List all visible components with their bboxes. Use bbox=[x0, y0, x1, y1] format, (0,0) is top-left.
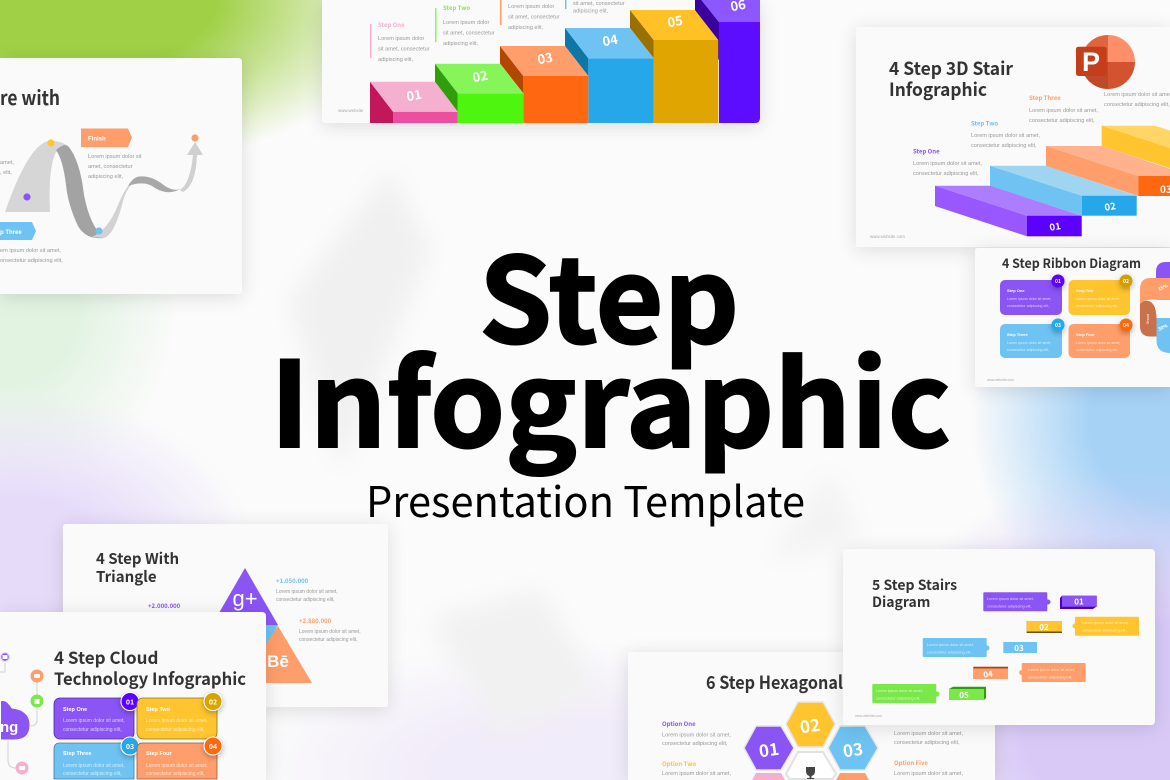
card: step two: consectetur adipiscing elit, bbox=[146, 727, 205, 733]
option two: Option Two bbox=[662, 759, 696, 768]
dot: purple bbox=[23, 193, 31, 201]
column 06 bbox=[695, 0, 760, 123]
dot: blue bbox=[95, 227, 103, 235]
card: step one: Step One bbox=[1007, 288, 1025, 293]
ribbon graphic: 15% bbox=[1157, 283, 1169, 293]
icon: green node bbox=[30, 694, 44, 708]
card: step four: Step Four bbox=[146, 751, 173, 757]
text: step two: sit amet, consectetur bbox=[443, 30, 495, 36]
option one: consectetur adipiscing elit, bbox=[662, 741, 728, 747]
stair 02: 02 bbox=[1103, 198, 1117, 214]
callout 03: consectetur adipiscing elit, bbox=[927, 650, 972, 654]
panel: 4 step 3D stair infographic bbox=[856, 27, 1170, 247]
card: step three: consectetur adipiscing elit, bbox=[1007, 348, 1049, 352]
triangle graphic: Bē bbox=[267, 652, 289, 671]
hexagon centre with trophy bbox=[786, 752, 836, 779]
heading: Infographic bbox=[889, 76, 987, 102]
hexagon 01: 01 bbox=[757, 735, 780, 762]
stat: 2.880.000 bbox=[299, 616, 361, 643]
option one bbox=[662, 719, 731, 747]
text: step three: Lorem ipsum dolor bbox=[508, 4, 554, 10]
card: step one: Lorem ipsum dolor sit amet, bbox=[63, 718, 125, 724]
icon: orange node bbox=[30, 670, 44, 682]
heading: Technology Infographic bbox=[54, 665, 246, 690]
panel: structure with ribbon bbox=[0, 58, 242, 294]
stair 04 bbox=[1102, 126, 1170, 168]
callout 02: Lorem ipsum dolor sit amet, bbox=[1082, 621, 1129, 625]
callout 05: Lorem ipsum dolor sit amet, bbox=[876, 689, 923, 693]
callout 02: consectetur adipiscing elit, bbox=[1082, 628, 1127, 632]
card: step four: Lorem ipsum dolor sit amet, bbox=[1076, 341, 1120, 345]
column 03: 03 bbox=[536, 47, 554, 68]
text: step three: Lorem ipsum dolor sit amet, bbox=[1029, 108, 1098, 114]
heading: 4 Step Cloud bbox=[54, 644, 158, 669]
panel: 4 step ribbon diagram bbox=[975, 248, 1170, 387]
card: step two: 02 bbox=[209, 698, 217, 708]
stair 02 bbox=[990, 166, 1137, 216]
text: step one: Lorem ipsum dolor bbox=[378, 36, 424, 42]
card: step two: Step Two bbox=[1076, 288, 1094, 293]
text: step two: Step Two bbox=[443, 3, 470, 12]
subtitle: Presentation Template bbox=[366, 469, 805, 530]
triangle graphic bbox=[212, 568, 312, 683]
card: step two bbox=[137, 692, 222, 739]
card: step one bbox=[54, 692, 139, 739]
option five: Lorem ipsum dolor sit amet, bbox=[894, 731, 963, 737]
stat: 1.050.000: Lorem ipsum dolor sit amet, bbox=[276, 589, 338, 595]
main title: Step bbox=[479, 206, 739, 377]
option five: Option Five bbox=[894, 758, 928, 767]
text: step four: adipiscing elit, bbox=[573, 8, 609, 14]
card: step two: 02 bbox=[1123, 278, 1129, 285]
heading: 6 Step Hexagonal bbox=[706, 669, 843, 695]
step block 05: 05 bbox=[959, 690, 969, 701]
callout 05: consectetur adipiscing elit, bbox=[876, 696, 921, 700]
hexagon pink bbox=[752, 773, 785, 780]
stat: 2.880.000: Lorem ipsum dolor sit amet, bbox=[299, 629, 361, 635]
text: step one: Step One bbox=[913, 146, 940, 156]
ribbon graphic: 30% bbox=[1157, 323, 1169, 333]
hexagon 01 bbox=[744, 726, 794, 770]
text: website: www.website bbox=[338, 108, 364, 113]
text: step one: Lorem ipsum dolor sit amet, bbox=[913, 161, 982, 167]
tag: step three bbox=[0, 222, 36, 240]
card: step two: consectetur adipiscing elit, bbox=[1076, 304, 1118, 308]
text: step four: consectetur adipiscing elit, bbox=[1104, 102, 1170, 108]
finish text: amet, consectetur bbox=[88, 164, 133, 170]
step block 05 bbox=[949, 687, 986, 701]
callout 05 bbox=[872, 684, 940, 703]
icon: powerpoint logo bbox=[1076, 35, 1135, 89]
option one: Option One bbox=[662, 719, 696, 728]
text: step two: Lorem ipsum dolor sit amet, bbox=[971, 133, 1040, 139]
text: step one: Step One bbox=[378, 20, 405, 29]
card: step one: Step One bbox=[63, 707, 87, 713]
card: step four: 04 bbox=[209, 742, 217, 752]
column 05 bbox=[630, 10, 718, 123]
stair 01 bbox=[935, 186, 1082, 236]
text: step four bbox=[565, 0, 625, 14]
card: step two: Lorem ipsum dolor sit amet, bbox=[146, 718, 208, 724]
dot: yellow bbox=[47, 139, 55, 147]
text: step three bbox=[1029, 93, 1098, 124]
card: step two bbox=[1068, 274, 1132, 315]
hexagon 02: 02 bbox=[798, 711, 821, 738]
ribbon graphic: Brand bbox=[1146, 314, 1150, 324]
stair 03 bbox=[1046, 146, 1170, 196]
icon: cloud: ng bbox=[0, 719, 18, 736]
tag: finish bbox=[81, 128, 132, 147]
stat: 1.050.000 bbox=[276, 576, 338, 603]
heading: 5 Step Stairs bbox=[872, 575, 957, 595]
text: step two: consectetur adipiscing elit, bbox=[971, 143, 1037, 149]
stat: 2.000.000: +2.000.000 bbox=[148, 601, 181, 610]
text: step one: sit amet, consectetur bbox=[378, 46, 430, 52]
text: step two bbox=[435, 3, 495, 47]
text: step three: adipiscing elit, bbox=[508, 25, 544, 31]
triangle graphic: g+ bbox=[232, 586, 258, 611]
text: step one bbox=[370, 20, 430, 63]
step block 03: 03 bbox=[1014, 643, 1024, 654]
card: step four: consectetur adipiscing elit, bbox=[146, 771, 205, 777]
callout 01: Lorem ipsum dolor sit amet, bbox=[987, 597, 1034, 601]
hexagon 02 bbox=[786, 702, 835, 747]
finish text: adipiscing elit, bbox=[88, 174, 124, 180]
ribbon graphic bbox=[1140, 262, 1170, 353]
card: step three: Step Three bbox=[63, 751, 91, 757]
callout 01 bbox=[983, 592, 1050, 611]
text: step two: Lorem ipsum dolor bbox=[443, 20, 489, 26]
stat: 1.050.000: +1.050.000 bbox=[276, 576, 309, 585]
column 01 bbox=[370, 82, 458, 123]
card: step one: 01 bbox=[1055, 278, 1061, 285]
text: step two: Step Two bbox=[971, 118, 998, 128]
panel: 4 step cloud technology infographic bbox=[0, 612, 266, 780]
heading: Triangle bbox=[96, 566, 157, 587]
option five bbox=[894, 731, 963, 777]
callout 02 bbox=[1072, 617, 1139, 636]
card: step four: Lorem ipsum dolor sit amet, bbox=[146, 763, 208, 769]
callout 04: consectetur adipiscing elit, bbox=[1028, 676, 1073, 680]
card: step four: consectetur adipiscing elit, bbox=[1076, 348, 1118, 352]
left text fragment: amet, bbox=[0, 160, 14, 166]
step block 03 bbox=[1003, 642, 1037, 654]
stat: 2.880.000: +2.880.000 bbox=[299, 616, 332, 625]
step block 02: 02 bbox=[1039, 622, 1049, 633]
dot: orange bbox=[191, 134, 199, 142]
main title: Infographic bbox=[270, 310, 951, 481]
left text fragment: , elit, bbox=[0, 170, 12, 176]
panel: 6 step hexagonal bbox=[628, 652, 995, 780]
step block 02 bbox=[1027, 621, 1062, 633]
text: website: www.website.com bbox=[870, 234, 905, 239]
heading: 4 Step Ribbon Diagram bbox=[1002, 253, 1141, 272]
step three text: onsectetur adipiscing elit, bbox=[0, 258, 63, 264]
card: step three: 03 bbox=[126, 742, 134, 752]
hexagon 03: 03 bbox=[841, 735, 864, 762]
text: step three: sit amet, consectetur bbox=[508, 14, 560, 20]
heading: 4 Step With bbox=[96, 548, 179, 569]
text: step one: consectetur adipiscing elit, bbox=[913, 171, 979, 177]
text: step three: Step Three bbox=[1029, 93, 1061, 102]
card: step two: Lorem ipsum dolor sit amet, bbox=[1076, 297, 1120, 301]
option two bbox=[662, 759, 731, 777]
card: step four: 04 bbox=[1123, 322, 1129, 329]
icon: pink node bbox=[16, 762, 28, 774]
callout 04 bbox=[1019, 663, 1086, 682]
stat: 2.880.000: consectetur adipiscing elit, bbox=[299, 637, 358, 643]
step block 01 bbox=[1060, 596, 1097, 609]
icon: cloud bbox=[0, 700, 30, 740]
stair 01: 01 bbox=[1048, 218, 1062, 234]
card: step one: Lorem ipsum dolor sit amet, bbox=[1007, 297, 1051, 301]
text: website: www.website.com bbox=[987, 378, 1014, 382]
card: step four bbox=[1068, 318, 1132, 358]
card: step one: consectetur adipiscing elit, bbox=[1007, 304, 1049, 308]
card: step three: Lorem ipsum dolor sit amet, bbox=[1007, 341, 1051, 345]
card: step three: Step Three bbox=[1007, 332, 1028, 337]
icon: powerpoint logo: P bbox=[1082, 47, 1100, 77]
card: step one: 01 bbox=[126, 698, 134, 708]
card: step one bbox=[1000, 274, 1064, 315]
panel title fragment: re with bbox=[0, 82, 60, 111]
column 04 bbox=[565, 28, 654, 123]
column 03 bbox=[500, 46, 588, 123]
card: step three: Lorem ipsum dolor sit amet, bbox=[63, 763, 125, 769]
text: step one bbox=[913, 146, 982, 177]
column 05: 05 bbox=[666, 10, 684, 31]
finish text: Lorem ipsum dolor sit bbox=[88, 154, 142, 160]
card: step four: Step Four bbox=[1076, 332, 1095, 337]
tag: step three: p Three bbox=[0, 230, 22, 236]
step block 01: 01 bbox=[1074, 596, 1084, 608]
ribbon arrow bbox=[5, 141, 203, 238]
text: step two bbox=[971, 118, 1040, 149]
card: step three bbox=[54, 737, 139, 779]
text: step four: sit amet, consectetur bbox=[573, 1, 625, 7]
main title bbox=[270, 206, 951, 481]
card: step three bbox=[1000, 318, 1064, 358]
text: step two: adipiscing elit, bbox=[443, 41, 479, 47]
callout 03 bbox=[923, 638, 990, 657]
panel: 5 step stairs diagram bbox=[843, 549, 1155, 725]
step three text: em ipsum dolor sit amet, bbox=[0, 248, 61, 254]
step block 04 bbox=[973, 667, 1008, 681]
card: step four bbox=[137, 737, 222, 779]
text: step three: consectetur adipiscing elit, bbox=[1029, 118, 1095, 124]
card: step one: consectetur adipiscing elit, bbox=[63, 727, 122, 733]
callout 04: Lorem ipsum dolor sit amet, bbox=[1028, 668, 1075, 672]
callout 01: consectetur adipiscing elit, bbox=[987, 604, 1032, 608]
text: website: www.website.com bbox=[855, 714, 882, 718]
column 02 bbox=[435, 64, 523, 123]
heading: Diagram bbox=[872, 592, 930, 612]
panel: six step 3D columns bbox=[322, 0, 760, 123]
card: step three: consectetur adipiscing elit, bbox=[63, 771, 122, 777]
hexagon 03 bbox=[828, 726, 878, 770]
option one: Lorem ipsum dolor sit amet, bbox=[662, 732, 731, 738]
panel: 4 step with triangle bbox=[63, 524, 388, 707]
card: step two: Step Two bbox=[146, 707, 171, 713]
hexagon orange bbox=[836, 773, 869, 780]
column 02: 02 bbox=[471, 65, 489, 86]
option two: Lorem ipsum dolor sit amet, bbox=[662, 771, 731, 777]
card: step three: 03 bbox=[1055, 322, 1061, 329]
column 01: 01 bbox=[405, 84, 423, 105]
connectors bbox=[0, 663, 37, 768]
icon: purple node bbox=[0, 652, 10, 662]
callout 03: Lorem ipsum dolor sit amet, bbox=[927, 643, 974, 647]
text: step three bbox=[500, 0, 560, 31]
column 04: 04 bbox=[601, 29, 619, 50]
stat: 1.050.000: consectetur adipiscing elit, bbox=[276, 597, 335, 603]
tag: finish: Finish bbox=[88, 136, 106, 142]
step block 04: 04 bbox=[983, 668, 994, 681]
heading: 4 Step 3D Stair bbox=[889, 55, 1013, 81]
option five: consectetur adipiscing elit, bbox=[894, 740, 960, 746]
option five: Lorem ipsum dolor sit amet, bbox=[894, 771, 963, 777]
text: step one: adipiscing elit, bbox=[378, 57, 414, 63]
